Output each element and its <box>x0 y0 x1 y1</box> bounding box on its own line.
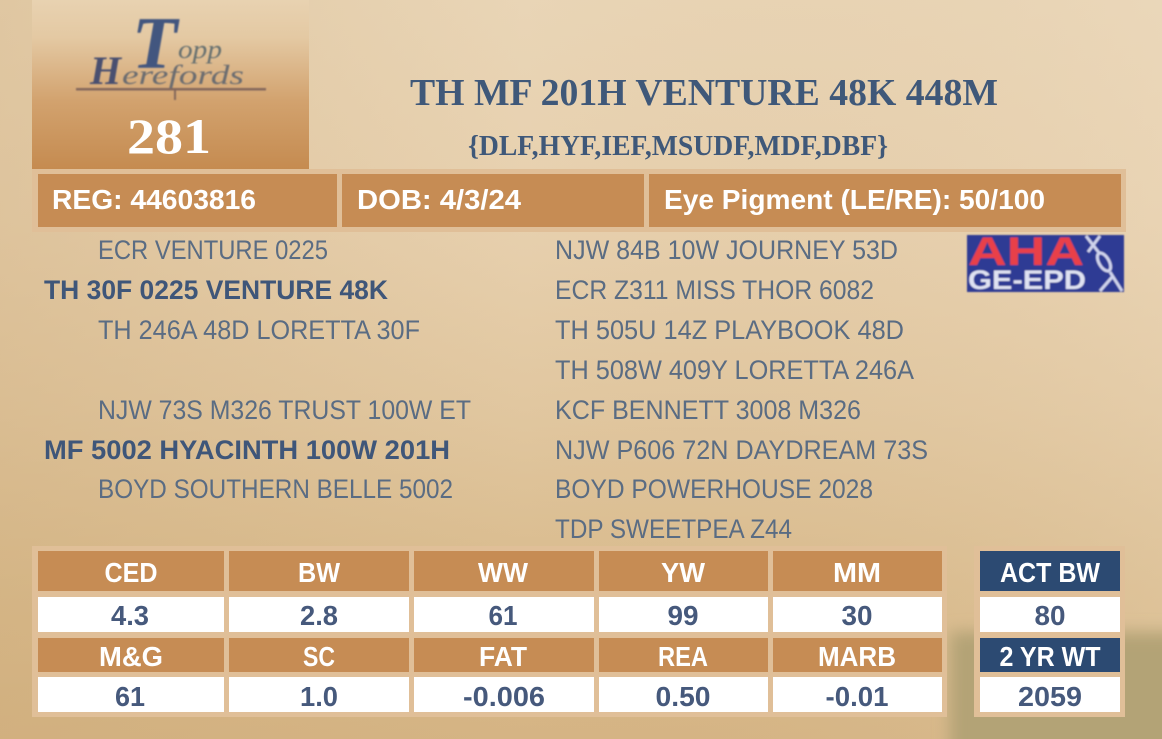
EPD values, row two: -0.01 <box>826 681 888 712</box>
EPD labels, row two: SC <box>303 641 335 672</box>
EPD labels, row one: CED <box>104 557 158 588</box>
panel: actual weights <box>974 546 1125 717</box>
registration number <box>38 174 337 227</box>
pedigree: grandparents column: TH 508W 409Y LORETTA 246A <box>555 355 914 385</box>
EPD values, row one: 99 <box>668 600 698 631</box>
pedigree: sire side: TH 246A 48D LORETTA 30F <box>98 315 420 345</box>
pedigree: grandparents column <box>555 235 928 544</box>
pedigree: grandparents column: TDP SWEETPEA Z44 <box>555 514 792 544</box>
EPD values, row two: 61 <box>115 681 145 712</box>
EPD labels, row one: MM <box>833 557 881 588</box>
table header cells, row two <box>38 638 942 672</box>
pedigree: grandparents column: BOYD POWERHOUSE 2028 <box>555 474 873 504</box>
EPD values, row two: -0.006 <box>463 681 545 712</box>
pedigree: dam side: MF 5002 HYACINTH 100W 201H <box>44 435 450 465</box>
panel: logo and lot number <box>32 0 309 169</box>
EPD values, row one: 2.8 <box>300 600 338 631</box>
table value cells, row one <box>38 597 942 632</box>
EPD values, row one: 4.3 <box>111 600 149 631</box>
pedigree: grandparents column: NJW 84B 10W JOURNEY 53D <box>555 235 898 265</box>
EPD labels, row one: YW <box>661 557 706 588</box>
pedigree: dam side: BOYD SOUTHERN BELLE 5002 <box>98 474 453 504</box>
two year weight: 2 YR WT <box>1000 641 1100 672</box>
EPD labels, row two: M&G <box>99 641 163 672</box>
pedigree: dam side <box>44 395 471 504</box>
icon: AHA GE-EPD badge: GE-EPD <box>968 265 1086 295</box>
icon: AHA GE-EPD badge <box>967 230 1124 295</box>
EPD labels, row two: REA <box>658 641 708 672</box>
pedigree: grandparents column: ECR Z311 MISS THOR 6082 <box>555 275 874 305</box>
EPD labels, row two: MARB <box>818 641 896 672</box>
pedigree: sire side <box>44 235 420 345</box>
date of birth <box>342 174 644 227</box>
EPD labels, row one <box>104 557 881 588</box>
pedigree: dam side: NJW 73S M326 TRUST 100W ET <box>98 395 471 425</box>
two year weight: 2059 <box>1018 681 1082 712</box>
EPD values, row one: 61 <box>488 600 518 631</box>
icon: AHA GE-EPD badge: AHA <box>968 230 1084 274</box>
two year weight <box>980 638 1120 712</box>
genetic status line: {DLF,HYF,IEF,MSUDF,MDF,DBF} <box>468 130 888 162</box>
eye pigment: Eye Pigment (LE/RE): 50/100 <box>664 184 1045 215</box>
logo: Topp Herefords: opp <box>178 35 222 64</box>
EPD labels, row two <box>99 641 896 672</box>
title: TH MF 201H VENTURE 48K 448M <box>410 72 998 114</box>
EPD labels, row two: FAT <box>479 641 527 672</box>
EPD labels, row one: WW <box>478 557 529 588</box>
EPD values, row one: 30 <box>842 600 872 631</box>
actual birth weight: ACT BW <box>1000 557 1101 588</box>
pedigree: grandparents column: TH 505U 14Z PLAYBOOK 48D <box>555 315 904 345</box>
pedigree: sire side: ECR VENTURE 0225 <box>98 235 328 265</box>
logo: Topp Herefords: erefords <box>122 60 244 90</box>
EPD values, row one <box>111 600 872 631</box>
EPD values, row two <box>115 681 888 712</box>
date of birth: DOB: 4/3/24 <box>357 184 521 215</box>
logo: Topp Herefords <box>76 3 266 100</box>
logo: Topp Herefords: T <box>132 3 180 85</box>
EPD values, row two: 1.0 <box>300 681 338 712</box>
EPD labels, row one: BW <box>298 557 341 588</box>
lot number: 281 <box>127 108 211 164</box>
panel: EPD table <box>32 546 947 717</box>
actual birth weight <box>980 551 1120 632</box>
actual birth weight: 80 <box>1034 600 1066 631</box>
panel: registration bar <box>32 169 1126 232</box>
pedigree: grandparents column: NJW P606 72N DAYDREAM 73S <box>555 435 928 465</box>
registration number: REG: 44603816 <box>52 184 256 215</box>
eye pigment <box>649 174 1121 227</box>
table value cells, row two <box>38 677 942 712</box>
pedigree: grandparents column: KCF BENNETT 3008 M326 <box>555 395 861 425</box>
EPD values, row two: 0.50 <box>656 681 710 712</box>
logo: Topp Herefords: H <box>89 48 123 93</box>
pedigree: sire side: TH 30F 0225 VENTURE 48K <box>44 275 388 305</box>
table header cells, row one <box>38 551 942 591</box>
